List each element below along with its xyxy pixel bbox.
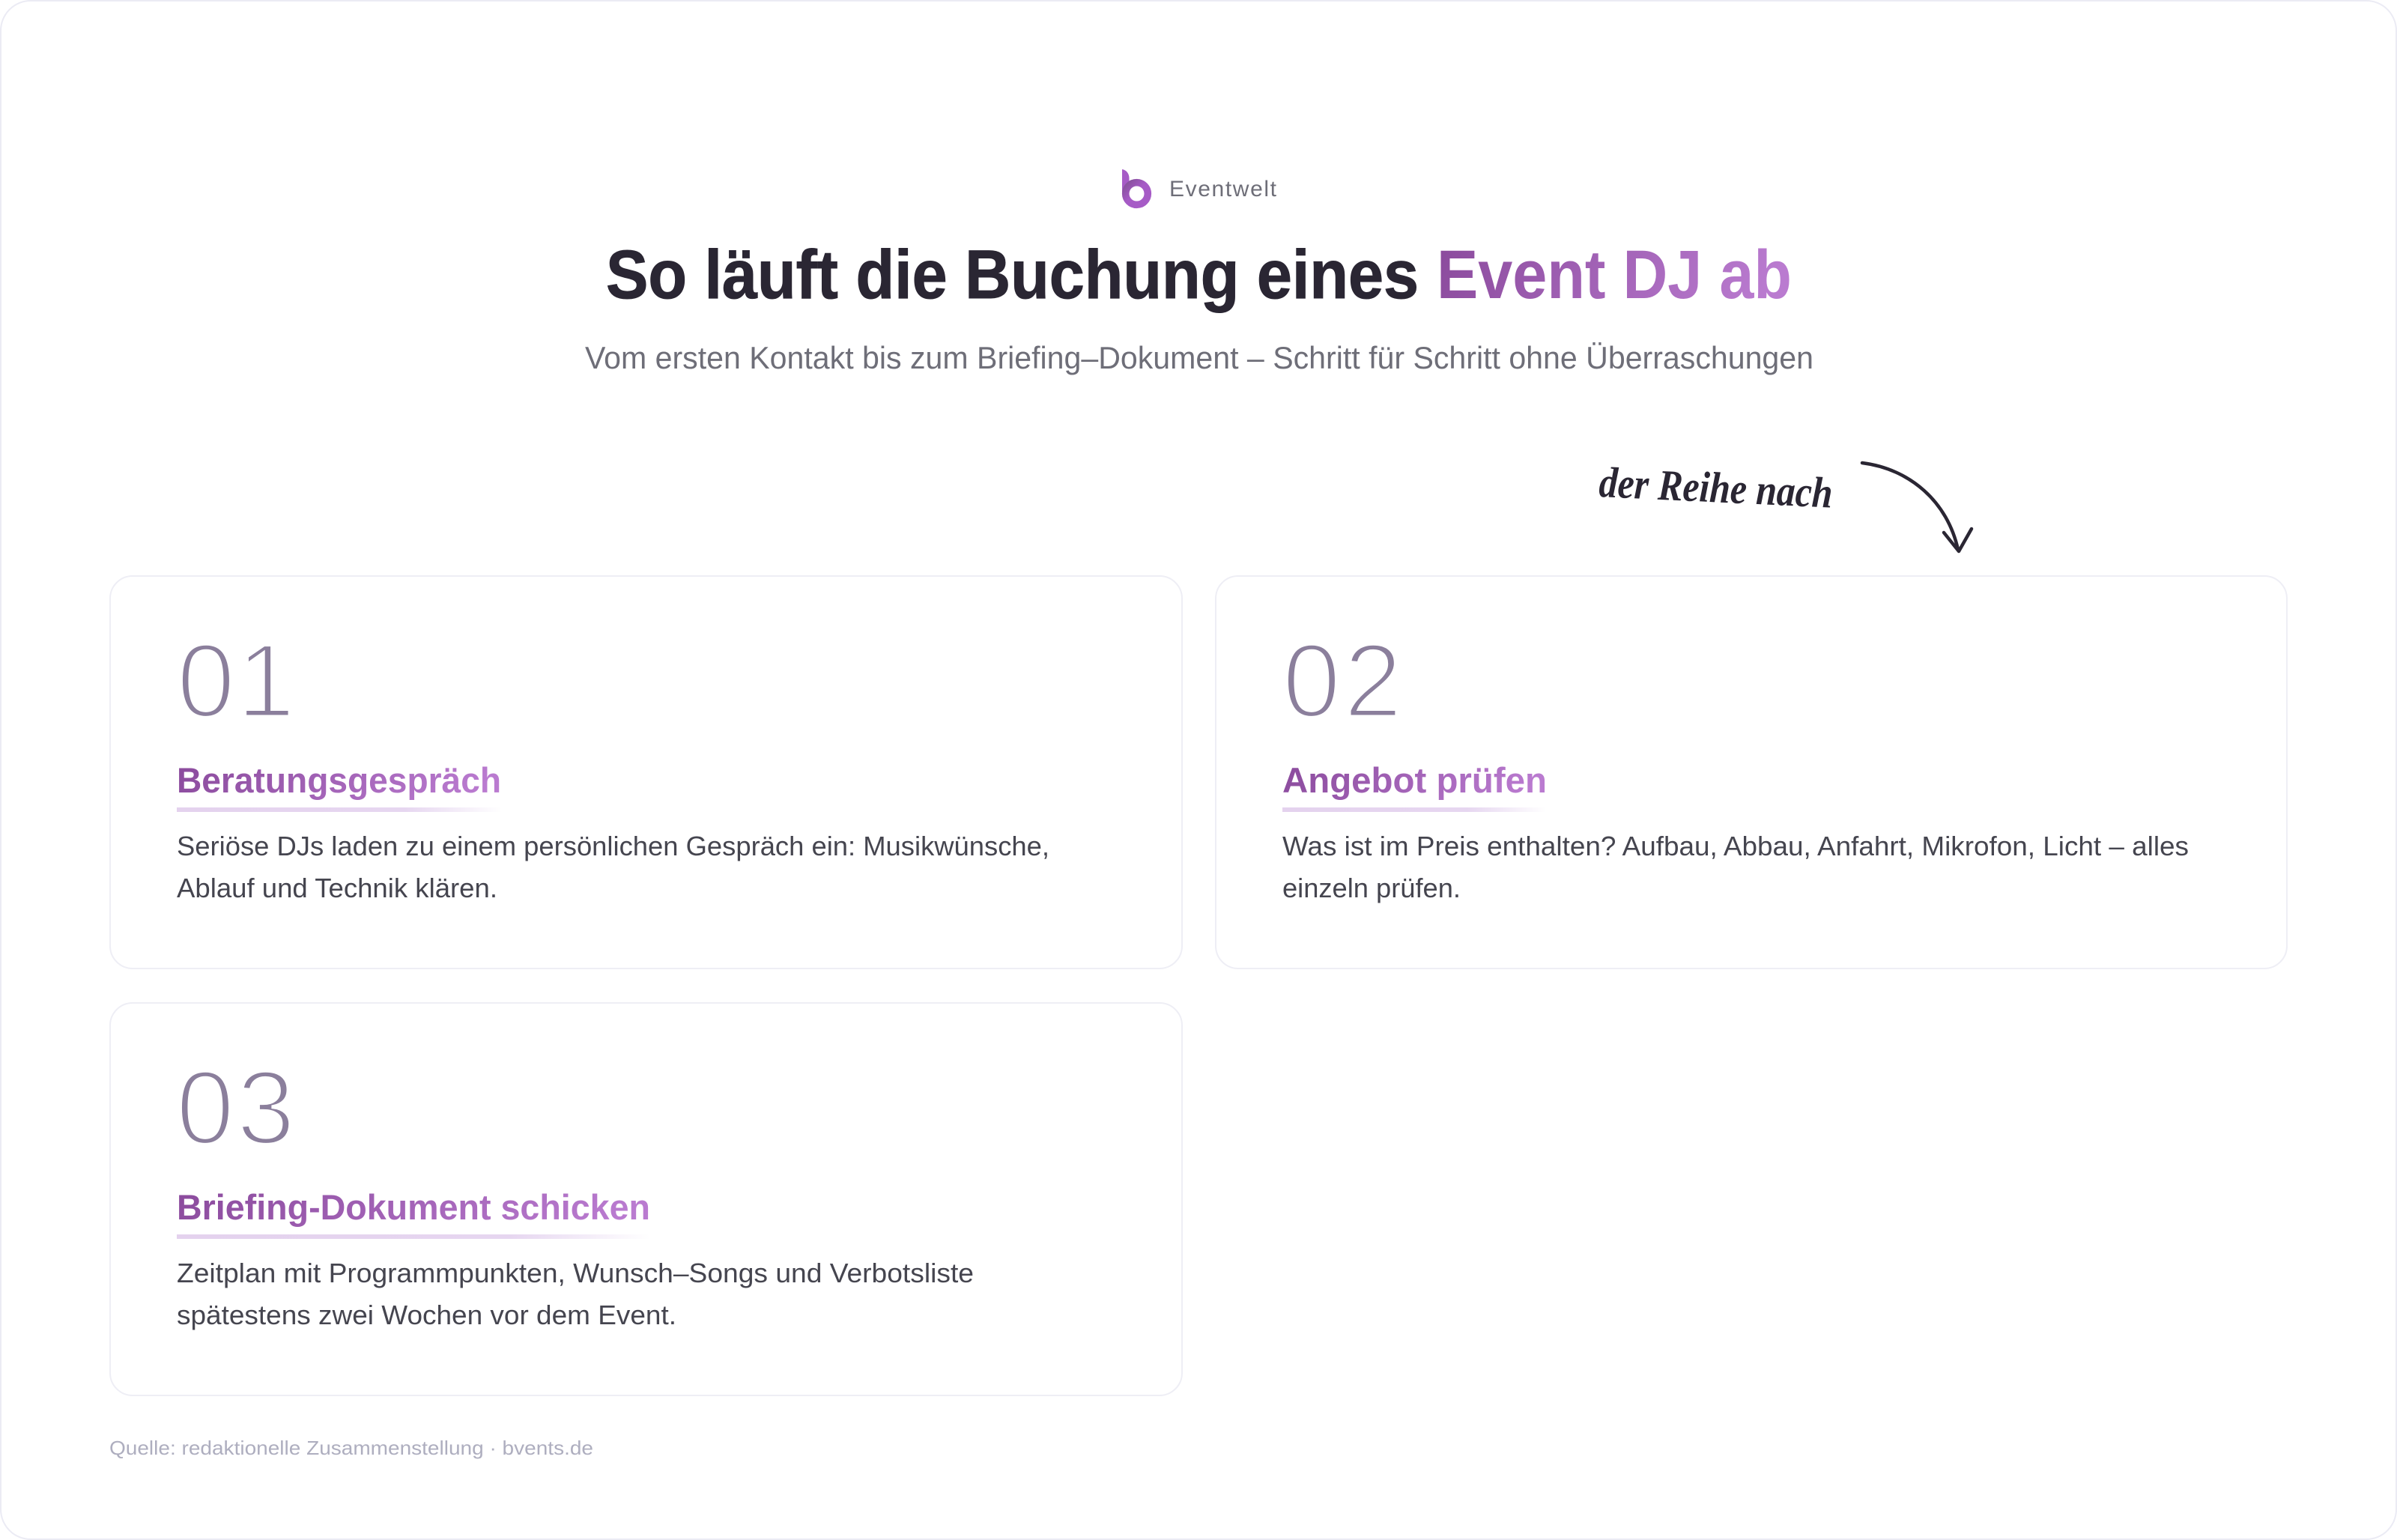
step text: spätestens zwei Wochen vor dem Event. — [177, 1300, 676, 1330]
heading underline — [177, 807, 502, 812]
heading underline — [177, 1234, 650, 1239]
brand name: Eventwelt — [1169, 177, 1277, 201]
step heading: Briefing-Dokument schicken — [177, 1187, 650, 1227]
step text: einzeln prüfen. — [1282, 873, 1461, 903]
step heading: Beratungsgespräch — [177, 760, 501, 800]
step heading: Angebot prüfen — [1282, 760, 1547, 800]
step number: 02 — [1282, 622, 1402, 739]
arrow — [1862, 463, 1972, 551]
step text — [177, 1258, 974, 1330]
step text — [1282, 831, 2189, 903]
title: Event DJ ab — [1437, 237, 1792, 313]
panel: step 01 — [110, 576, 1182, 968]
step number: 01 — [177, 622, 295, 739]
step text: Ablauf und Technik klären. — [177, 873, 497, 903]
step number: 03 — [176, 1049, 295, 1166]
handwritten note: der Reihe nach — [1598, 458, 1834, 518]
icon: b logo mark — [1122, 169, 1148, 204]
panel: step 03 — [110, 1003, 1182, 1395]
title: So läuft die Buchung eines — [606, 237, 1419, 313]
subtitle: Vom ersten Kontakt bis zum Briefing–Dokument – Schritt für Schritt ohne Überraschungen — [585, 340, 1813, 375]
step text: Seriöse DJs laden zu einem persönlichen Gespräch ein: Musikwünsche, — [177, 831, 1049, 861]
step text: Was ist im Preis enthalten? Aufbau, Abbau, Anfahrt, Mikrofon, Licht – alles — [1282, 831, 2189, 861]
panel: step 02 — [1216, 576, 2287, 968]
step text: Zeitplan mit Programmpunkten, Wunsch–Songs und Verbotsliste — [177, 1258, 974, 1288]
brand logo — [1122, 169, 1277, 204]
heading underline — [1282, 807, 1546, 812]
step text — [177, 831, 1049, 903]
source footer: Quelle: redaktionelle Zusammenstellung · bvents.de — [109, 1437, 593, 1459]
